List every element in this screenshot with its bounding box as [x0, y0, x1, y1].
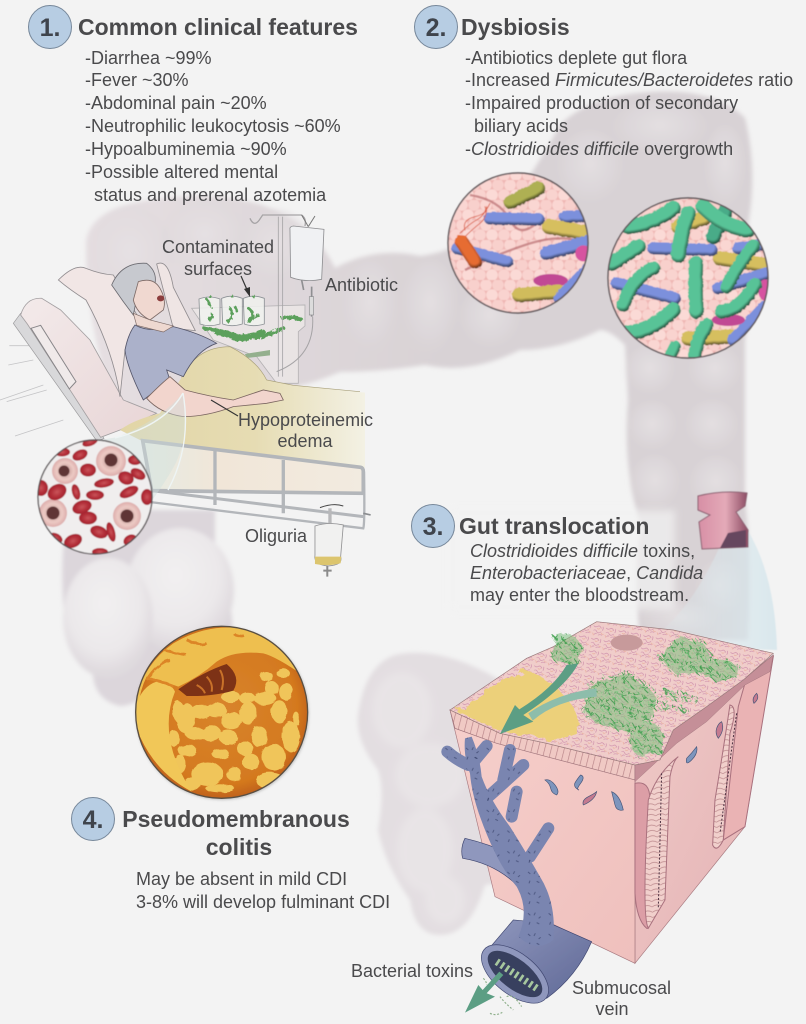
submucosal vein tube: [471, 920, 592, 1014]
badge 4: 4.: [83, 806, 103, 834]
green biofilm patches: [550, 633, 742, 760]
badge 3: 3.: [423, 513, 443, 541]
clinical features list: -Possible altered mental: [85, 162, 278, 182]
title 2: Dysbiosis: [461, 14, 570, 40]
mattress: [21, 298, 157, 437]
bacterium: yellow: [549, 227, 590, 233]
vein branches: [447, 737, 554, 946]
IV pole and antibiotic bag: [250, 215, 324, 377]
title 1: Common clinical features: [78, 14, 358, 40]
patient head: [112, 263, 173, 332]
section 1 heading: [28, 6, 358, 48]
crypts: [635, 657, 773, 929]
dysbiosis list: -Impaired production of secondary: [465, 93, 738, 113]
patient torso: [125, 325, 217, 400]
label: hypoproteinemic edema: edema: [277, 431, 334, 451]
block: front face: [450, 710, 635, 963]
badge 4: [72, 798, 114, 840]
bed side rail: [143, 441, 371, 528]
title 3: Gut translocation: [459, 513, 649, 539]
section 2 heading: [414, 6, 570, 48]
crypt opening: [611, 635, 643, 651]
green arrows: [465, 663, 597, 1013]
urine bag: [315, 508, 343, 577]
green C. difficile rods: [612, 207, 755, 357]
dysbiosis list: -Clostridioides difficile overgrowth: [465, 139, 733, 159]
surface epithelium band: [450, 710, 635, 780]
dysbiosis list: biliary acids: [474, 116, 568, 136]
label: oliguria: Oliguria: [245, 526, 308, 546]
table with contaminated jars: [192, 296, 305, 383]
clinical features list: status and prerenal azotemia: [94, 185, 327, 205]
callout line: edema: [211, 400, 238, 416]
label: contaminated surfaces: Contaminated: [162, 237, 274, 257]
blanket edge: [182, 347, 360, 392]
blanket: [120, 347, 365, 468]
label: submucosal vein: vein: [595, 999, 629, 1019]
badge 1: 1.: [40, 14, 60, 42]
clinical features list: -Neutrophilic leukocytosis ~60%: [85, 116, 341, 136]
clinical features list: [85, 48, 341, 205]
label: hypoproteinemic edema: Hypoproteinemic: [238, 410, 373, 430]
clinical features list: -Fever ~30%: [85, 70, 189, 90]
left mucosal fold: [133, 682, 192, 792]
illustration: patient in hospital bed: [0, 215, 371, 577]
specimen jars: [199, 296, 264, 326]
yellow pseudomembrane: [455, 668, 582, 740]
circle: normal gut flora: [446, 172, 590, 314]
pseudomembranous colitis text: [136, 869, 390, 912]
clinical features list: -Hypoalbuminemia ~90%: [85, 139, 287, 159]
pseudomembranous colitis text: May be absent in mild CDI: [136, 869, 347, 889]
block: top surface: [450, 622, 773, 765]
blue bacteria: [617, 245, 767, 340]
block: right face: [635, 655, 773, 963]
dysbiosis list: -Antibiotics deplete gut flora: [465, 48, 688, 68]
C. difficile: flagella: [460, 203, 490, 238]
yellow bacteria: [678, 218, 765, 338]
bacterium: olive: [511, 188, 538, 202]
title 4: [122, 806, 350, 860]
colon: sigmoid: [358, 653, 520, 935]
colon background: [62, 92, 753, 935]
leaking toxins: [483, 978, 522, 1015]
badge 1: [28, 6, 72, 48]
patient arm: [147, 377, 283, 417]
label: contaminated surfaces: surfaces: [184, 259, 252, 279]
badge 2: 2.: [426, 14, 446, 42]
label: contaminated surfaces: [162, 237, 274, 279]
colon: ascending: [62, 510, 234, 706]
badge 3: [412, 504, 454, 548]
circle: C. difficile overgrowth: [606, 196, 770, 360]
translocation text: [470, 541, 703, 605]
mucosal tissue block: [447, 622, 773, 1015]
bed lines: [0, 346, 63, 436]
label: bacterial toxins: Bacterial toxins: [351, 961, 473, 981]
translocation text: Enterobacteriaceae, Candida: [470, 563, 703, 583]
colon wall cutaway and zoom cone: [640, 492, 777, 650]
translocation text: may enter the bloodstream.: [470, 585, 689, 605]
dysbiosis list: -Increased Firmicutes/Bacteroidetes ratio: [465, 70, 793, 90]
red blood cells: [34, 436, 153, 556]
label: submucosal vein: Submucosal: [572, 978, 671, 998]
pseudomembranous colitis text: 3-8% will develop fulminant CDI: [136, 892, 390, 912]
zoom cone to blood smear: [100, 393, 185, 503]
label: antibiotic: Antibiotic: [325, 275, 398, 295]
endoscopic view of pseudomembranes: [133, 626, 308, 798]
blood smear circle: [34, 436, 153, 556]
label: submucosal vein: [572, 978, 671, 1019]
fade behind text 3: [450, 510, 675, 610]
translocation text: Clostridioides difficile toxins,: [470, 541, 695, 561]
pink cells: [575, 245, 591, 261]
upper mucosal fold: [136, 628, 296, 703]
label: hypoproteinemic edema: [238, 410, 373, 451]
lumen: [178, 664, 236, 696]
pillows: [58, 263, 195, 397]
badge 2: [414, 6, 458, 48]
white blood cells: [39, 446, 141, 530]
dysbiosis list: [465, 48, 793, 159]
bacterium: blue: [482, 211, 546, 226]
title 4: Pseudomembranous: [122, 806, 350, 832]
pink cells: [758, 278, 768, 301]
title 4: colitis: [206, 834, 272, 860]
C. difficile: body: [462, 242, 475, 262]
yellow plaques: [169, 669, 299, 792]
green spill: [205, 317, 302, 339]
section 4 heading: [72, 798, 350, 860]
mucosal venules: [545, 693, 758, 810]
clinical features list: -Abdominal pain ~20%: [85, 93, 267, 113]
clinical features list: -Diarrhea ~99%: [85, 48, 212, 68]
section 3 heading: [412, 504, 649, 548]
colon: transverse and descending: [85, 92, 753, 640]
bed back frame: [13, 313, 104, 442]
bed handle: [31, 325, 76, 389]
arrow: contaminated surfaces: [241, 276, 250, 297]
